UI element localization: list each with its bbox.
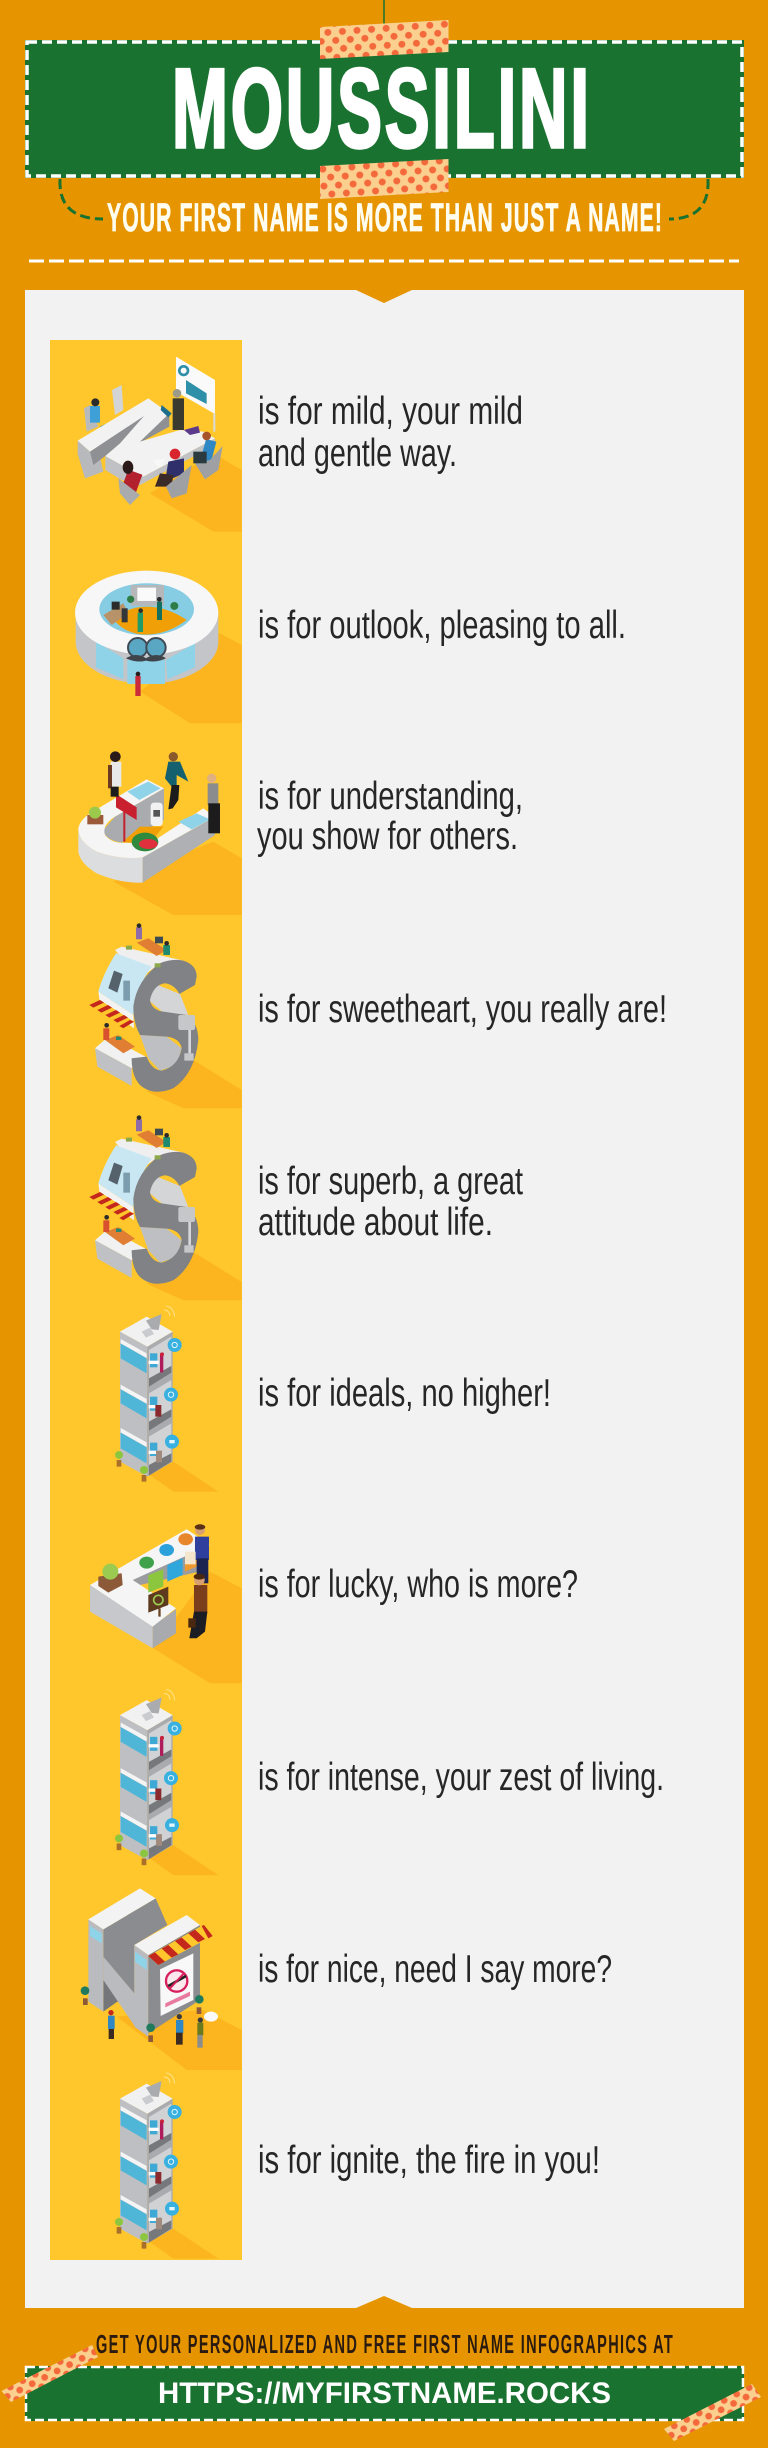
icon: letter S second	[89, 1115, 242, 1300]
hanging string	[383, 0, 385, 24]
icon: letter I tower third	[115, 2073, 218, 2259]
icon: letter S first	[89, 923, 242, 1108]
title: MOUSSILINI	[172, 45, 589, 171]
panel: main letters	[25, 290, 744, 2308]
text: O line: is for outlook, pleasing to all.	[258, 604, 626, 647]
text: L line: is for lucky, who is more?	[258, 1563, 578, 1606]
tape: banner bottom	[320, 159, 448, 199]
url: HTTPS://MYFIRSTNAME.ROCKS	[158, 2377, 611, 2410]
text: M line: and gentle way.	[258, 432, 457, 475]
panel: footer url banner	[25, 2366, 744, 2421]
tape: footer left	[2, 2345, 98, 2402]
tape: banner top	[320, 20, 448, 59]
text: N line: is for nice, need I say more?	[258, 1948, 612, 1991]
icon: letter U food stall	[78, 751, 242, 915]
connector: right dashed curve	[669, 179, 708, 219]
icon: letter L recycling counter	[90, 1524, 242, 1683]
text: U line: is for understanding,	[258, 775, 523, 818]
text: S line two: is for superb, a great	[258, 1160, 523, 1203]
tape: footer right	[664, 2384, 761, 2441]
icon: letter I tower first	[115, 1306, 218, 1492]
footer call to action: GET YOUR PERSONALIZED AND FREE FIRST NAME INFOGRAPHICS AT	[96, 2331, 673, 2359]
text: M line: is for mild, your mild	[258, 390, 523, 433]
connector: left dashed curve	[60, 179, 103, 219]
icon: letter O optician	[75, 571, 242, 723]
text: I line one: is for ideals, no higher!	[258, 1372, 551, 1415]
text: U line: you show for others.	[257, 815, 518, 858]
text: S line two: attitude about life.	[258, 1201, 493, 1244]
icon: letter M meeting table	[78, 357, 242, 532]
icon: letter N no smoking building	[81, 1888, 242, 2070]
panel: title banner	[25, 40, 744, 178]
text: I line three: is for ignite, the fire in you!	[258, 2139, 600, 2182]
yellow column	[50, 340, 242, 2260]
icon: letter I tower second	[115, 1689, 218, 1875]
subtitle: YOUR FIRST NAME IS MORE THAN JUST A NAME!	[107, 195, 662, 240]
